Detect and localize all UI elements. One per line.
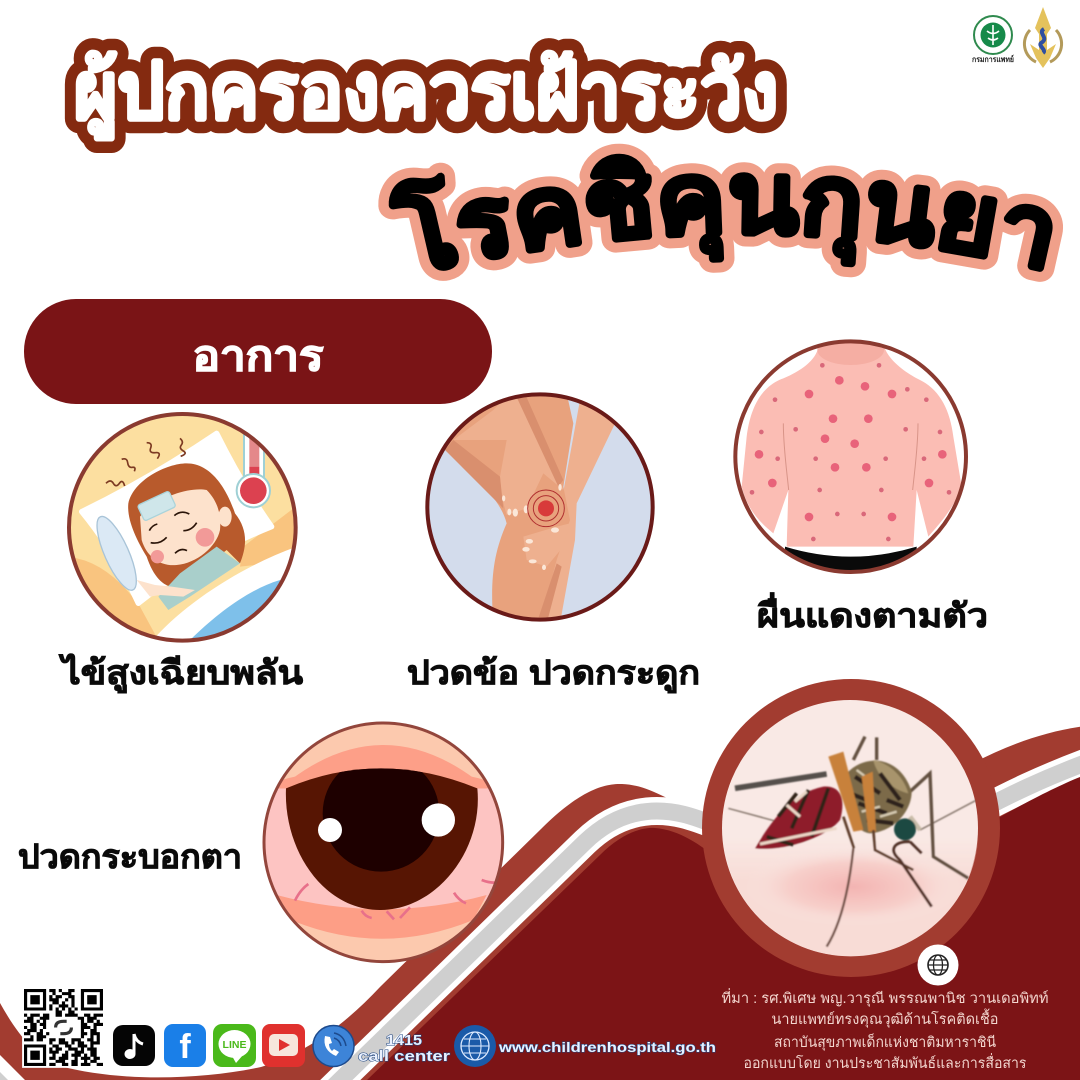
icon: LINE [213,1024,256,1067]
website address: www.childrenhospital.go.th [498,1039,716,1055]
logo: royal emblem [1024,7,1062,68]
icon: Facebook: f [179,1028,191,1066]
icon: red eye [260,723,507,962]
call center number: call center [358,1048,450,1065]
source credits [722,988,1048,1072]
QR code [22,987,105,1068]
icon: website globe [454,1025,496,1067]
mosquito photo circle [702,679,1000,977]
label: high fever: ไข้สูงเฉียบพลัน [59,653,303,694]
logo: department of medical services [972,16,1014,64]
call center number: 1415 [386,1032,422,1049]
icon: YouTube [262,1024,305,1067]
label: eye socket pain: ปวดกระบอกตา [18,838,242,875]
symptoms heading pill: อาการ [192,333,324,379]
icon: fever girl in bed [67,410,300,643]
icon: phone [313,1026,354,1066]
title line 2: โรคชิคุนกุนยา [388,154,1053,272]
label: joint and bone pain: ปวดข้อ ปวดกระดูก [407,654,700,694]
logo: department of medical services: กรมการแพทย์ [972,54,1014,64]
source credits: ที่มา : รศ.พิเศษ พญ.วารุณี พรรณพานิช วานเดอพิทท์ [722,988,1048,1007]
icon: knee pain [423,390,657,623]
label: rash: ผื่นแดงตามตัว [757,592,988,634]
icon: web badge [918,944,958,986]
icon: TikTok [113,1025,155,1066]
title line 1: ผู้ปกครองควรเฝ้าระวัง [74,47,778,140]
icon: rash on torso [730,335,970,578]
background waves [0,726,1080,1080]
call center number [358,1032,450,1065]
source credits: สถาบันสุขภาพเด็กแห่งชาติมหาราชินี [774,1032,996,1051]
source credits: นายแพทย์ทรงคุณวุฒิด้านโรคติดเชื้อ [772,1008,998,1028]
symptoms heading pill [24,299,492,404]
title line 1: ผู้ปกครองควรเฝ้าระวัง [74,47,778,140]
title line 2: โรคชิคุนกุนยา [378,144,1063,282]
icon: LINE: LINE [223,1039,246,1051]
source credits: ออกแบบโดย งานประชาสัมพันธ์และการสื่อสาร [744,1053,1027,1072]
icon: Facebook [164,1024,206,1067]
